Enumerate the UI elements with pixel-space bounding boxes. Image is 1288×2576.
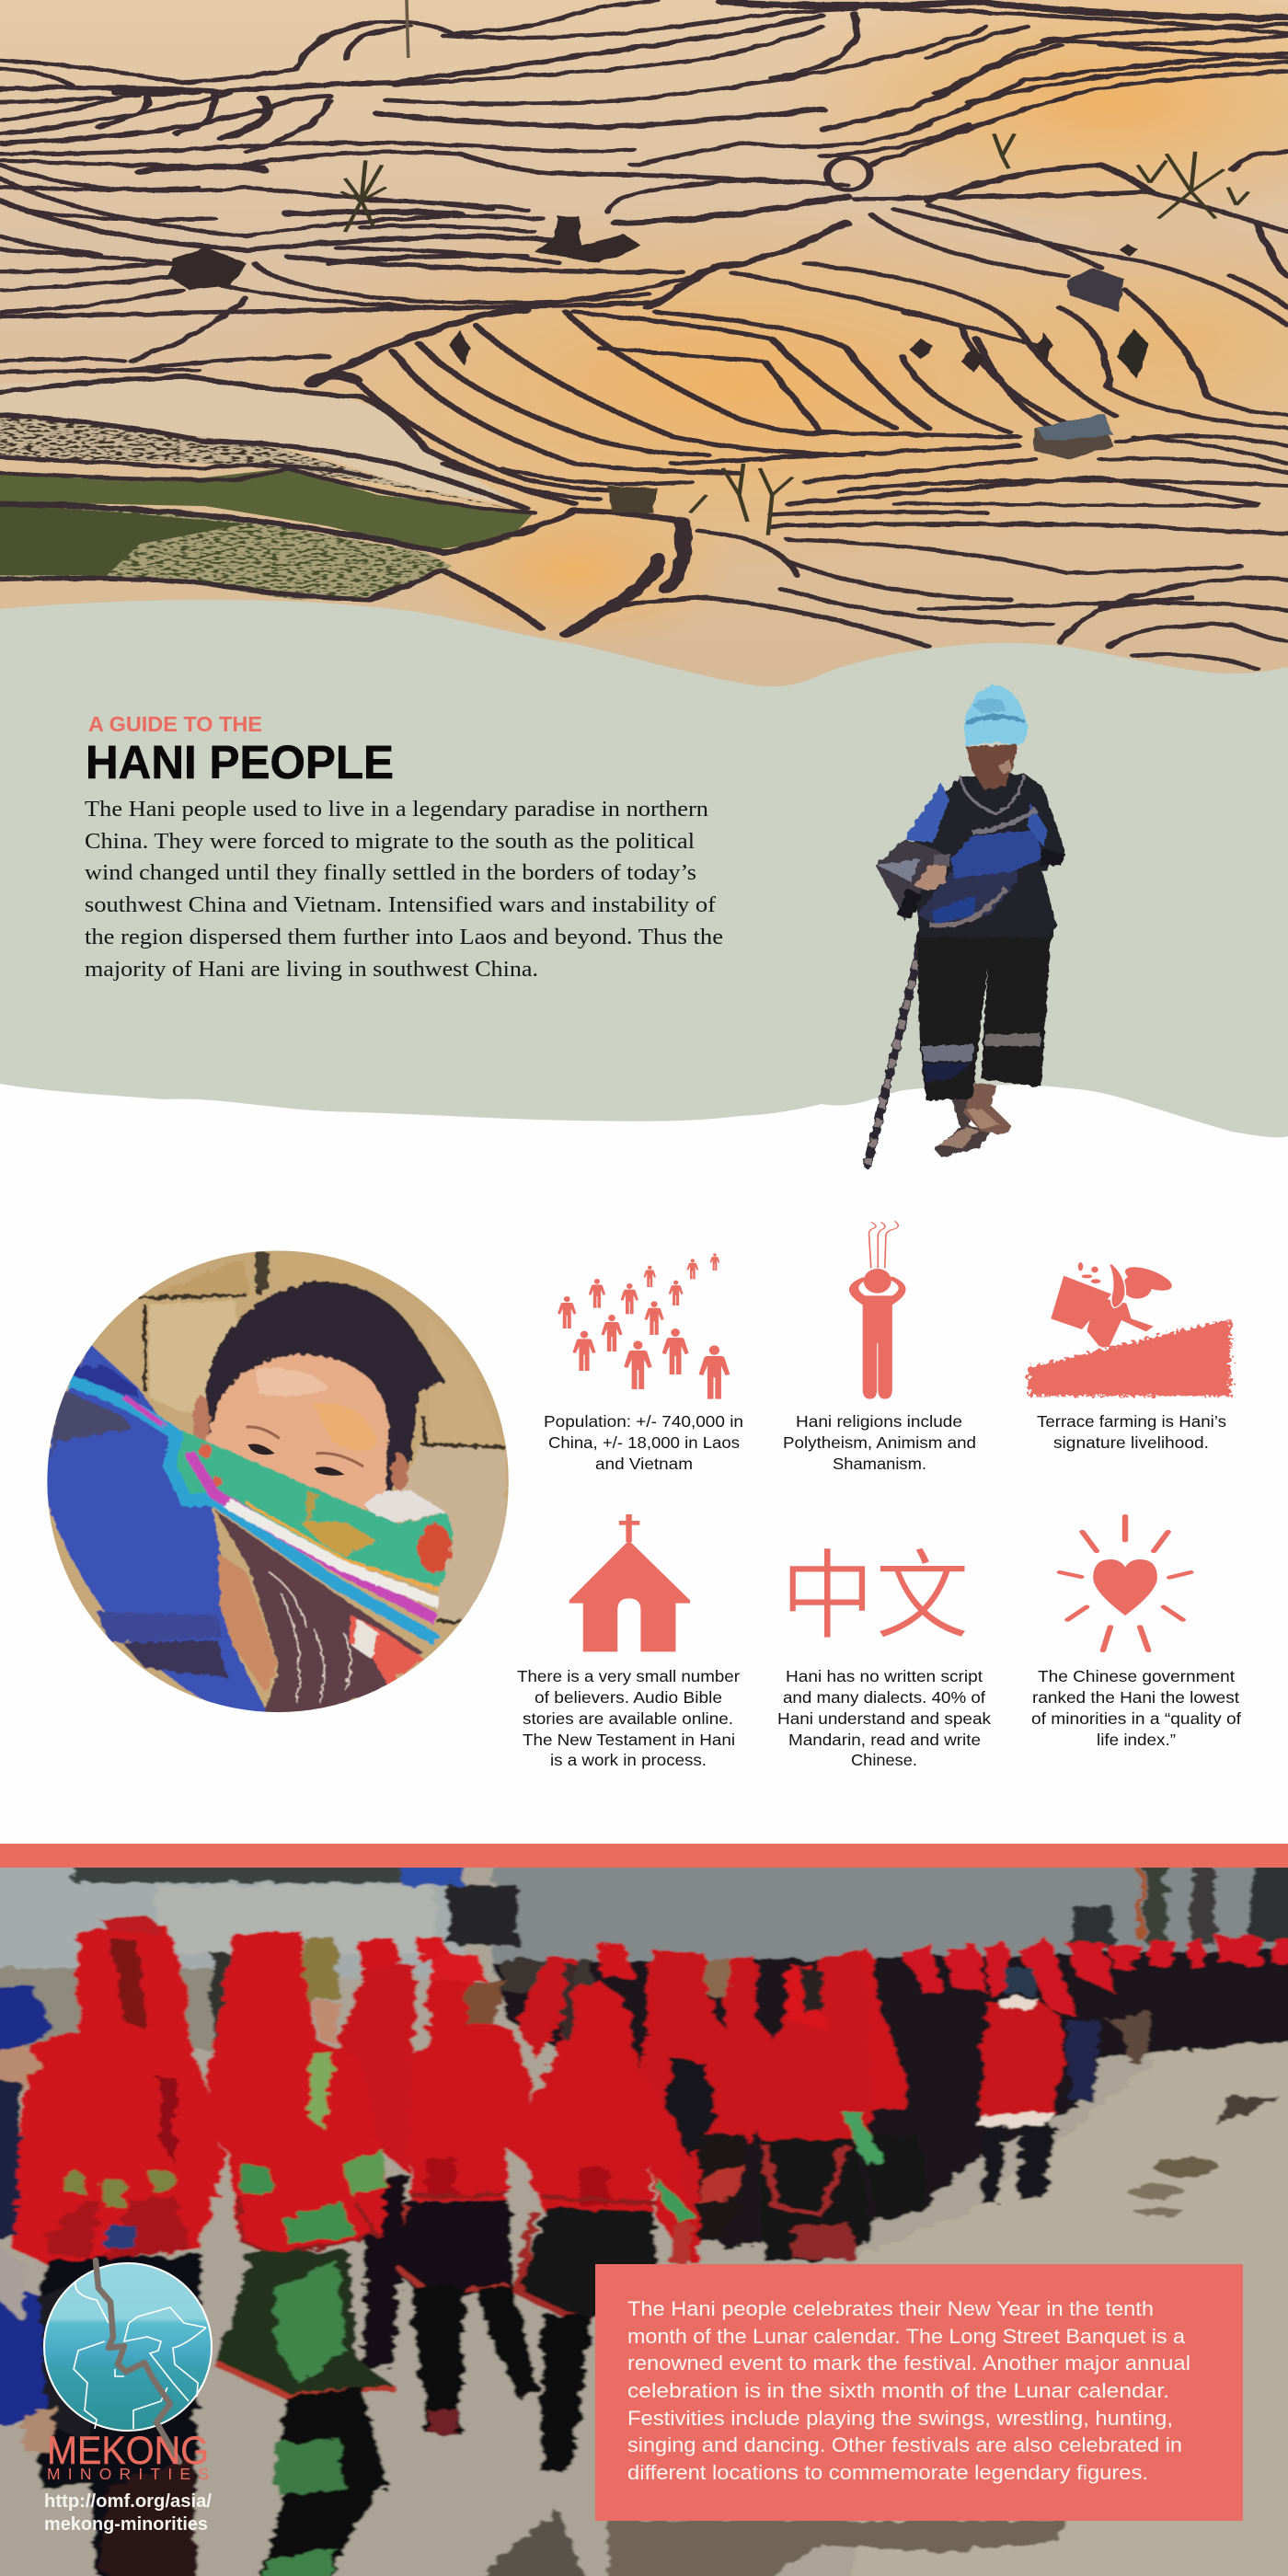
woman 2: [210, 1930, 386, 2256]
caption: quality of life: of minorities in a “quality of: [1031, 1709, 1241, 1728]
back woman: [337, 1963, 415, 2173]
icon: population crowd: [558, 1253, 730, 1399]
caption: livelihood: [1037, 1412, 1226, 1452]
mid women: [838, 1949, 903, 2111]
woman 3: [403, 1978, 534, 2202]
upper network: [0, 0, 657, 83]
feet: [935, 1096, 991, 1157]
caption: believers: is a work in process.: [550, 1751, 707, 1769]
photo: elderly Hani woman with cane: [868, 684, 1065, 1165]
logo: Mekong Minorities: [44, 2260, 212, 2535]
lower left banks: [0, 377, 575, 504]
exposed arm: [218, 1553, 278, 1693]
photo: rice terraces at sunset: [0, 0, 1288, 699]
intro paragraph: The Hani people used to live in a legendary paradise in northern: [85, 797, 708, 822]
panel: intro sage wave band: [0, 600, 1288, 1137]
caption: population: Population: +/- 740,000 in: [544, 1412, 743, 1431]
brown cloth: [214, 1510, 423, 1718]
caption: believers: There is a very small number: [517, 1667, 740, 1685]
website link: [44, 2491, 212, 2535]
eyes: [247, 1443, 275, 1455]
central sweep: [567, 312, 1018, 437]
far woman in red dress: [1006, 1969, 1033, 1995]
caption: language: Chinese.: [851, 1751, 917, 1769]
blue garment: [40, 1345, 269, 1715]
decorative trim: [69, 1382, 436, 1640]
caption: religion: [783, 1412, 976, 1473]
stone wall: [48, 1251, 509, 1708]
caption: quality of life: ranked the Hani the lowest: [1032, 1688, 1239, 1707]
heading kicker: A GUIDE TO THE: [88, 712, 262, 736]
caption: quality of life: life index.”: [1097, 1731, 1176, 1749]
callout: new year festival text box: celebration is in the sixth month of the Lunar calendar.: [627, 2379, 1169, 2402]
caption: religion: Shamanism.: [833, 1455, 926, 1473]
walls and ground: [0, 1849, 1288, 2576]
caption: population: [544, 1412, 743, 1473]
coral divider band: [0, 1844, 1288, 1868]
ears: [192, 1396, 210, 1443]
callout: new year festival text box: The Hani people celebrates their New Year in the tenth: [627, 2297, 1154, 2320]
caption: language: [777, 1667, 991, 1769]
callout: new year festival text box: different locations to commemorate legendary figures.: [627, 2461, 1148, 2484]
logo Mekong river line: [96, 2260, 179, 2462]
icon grid: [558, 1221, 1231, 1659]
trousers: [917, 925, 1056, 1100]
icon: church: [569, 1514, 690, 1651]
torso: [908, 774, 1065, 937]
caption: religion: Hani religions include: [796, 1412, 962, 1431]
dark clumps, huts, trees: [168, 216, 1148, 512]
intro paragraph: southwest China and Vietnam. Intensified wars and instability of: [85, 892, 717, 917]
website link: http://omf.org/asia/: [44, 2491, 212, 2512]
face: [205, 1354, 388, 1511]
intro paragraph: majority of Hani are living in southwest China.: [85, 957, 538, 982]
callout: new year festival text box: month of the Lunar calendar. The Long Street Banquet is a: [627, 2325, 1185, 2348]
callout: new year festival text box: singing and dancing. Other festivals are also celebrated in: [627, 2433, 1182, 2456]
logo subword: MINORITIES: [47, 2465, 209, 2483]
caption: quality of life: [1031, 1667, 1241, 1749]
woman 4: [501, 1980, 690, 2263]
caption: livelihood: signature livelihood.: [1053, 1433, 1209, 1452]
caption: language: Mandarin, read and write: [788, 1731, 981, 1749]
caption: population: and Vietnam: [595, 1455, 693, 1473]
caption: language: Hani understand and speak: [777, 1709, 991, 1728]
green cloth: [170, 1425, 454, 1587]
main title: HANI PEOPLE: [86, 736, 394, 788]
heading: [86, 712, 394, 788]
red patch: [350, 1616, 423, 1685]
hand: [914, 866, 946, 891]
left foreground figure: [0, 1985, 51, 2054]
trees: [341, 133, 1248, 535]
cane: [868, 925, 923, 1165]
intro paragraph: wind changed until they finally settled in the borders of today’s: [85, 860, 696, 885]
caption: believers: [517, 1667, 740, 1769]
website link: mekong-minorities: [44, 2514, 208, 2535]
caption: language: Hani has no written script: [786, 1667, 983, 1685]
logo wordmark: MEKONG: [47, 2429, 209, 2473]
spine down the middle: [649, 223, 846, 307]
caption: religion: Polytheism, Animism and: [783, 1433, 976, 1452]
caption: quality of life: The Chinese government: [1038, 1667, 1235, 1685]
intro paragraph: China. They were forced to migrate to the south as the political: [85, 829, 695, 854]
callout: new year festival text box: Festivities include playing the swings, wrestling, hunting,: [627, 2407, 1173, 2430]
icon: Chinese characters: 中文: [780, 1517, 970, 1659]
woman 1: [12, 1926, 226, 2266]
caption: population: China, +/- 18,000 in Laos: [548, 1433, 740, 1452]
left sleeve: [876, 839, 945, 921]
callout: new year festival text box: [595, 2264, 1243, 2521]
distant crowd: [493, 1949, 1288, 2248]
headscarf: [964, 684, 1028, 747]
face: [966, 744, 1018, 790]
caption: language: and many dialects. 40% of: [783, 1688, 985, 1707]
caption: livelihood: Terrace farming is Hani’s: [1037, 1412, 1226, 1431]
icon: farmer on terrace: [1028, 1262, 1231, 1396]
intro paragraph: the region dispersed them further into Laos and beyond. Thus the: [85, 925, 723, 949]
callout: new year festival text box: renowned event to mark the festival. Another major annual: [627, 2352, 1190, 2375]
fur lining: [363, 1490, 446, 1522]
caption: believers: The New Testament in Hani: [523, 1731, 735, 1749]
icon: praying figure with incense: [849, 1221, 906, 1399]
caption: believers: of believers. Audio Bible: [535, 1688, 722, 1707]
intro paragraph: [85, 797, 723, 982]
hair: [205, 1281, 446, 1497]
caption: believers: stories are available online.: [523, 1709, 733, 1728]
photo: procession of women in red: [0, 1849, 1288, 2576]
photo: child carried on back in circular frame: [47, 1251, 509, 1713]
icon: heart with rays: [1060, 1516, 1190, 1650]
logo map disc: [44, 2263, 212, 2431]
